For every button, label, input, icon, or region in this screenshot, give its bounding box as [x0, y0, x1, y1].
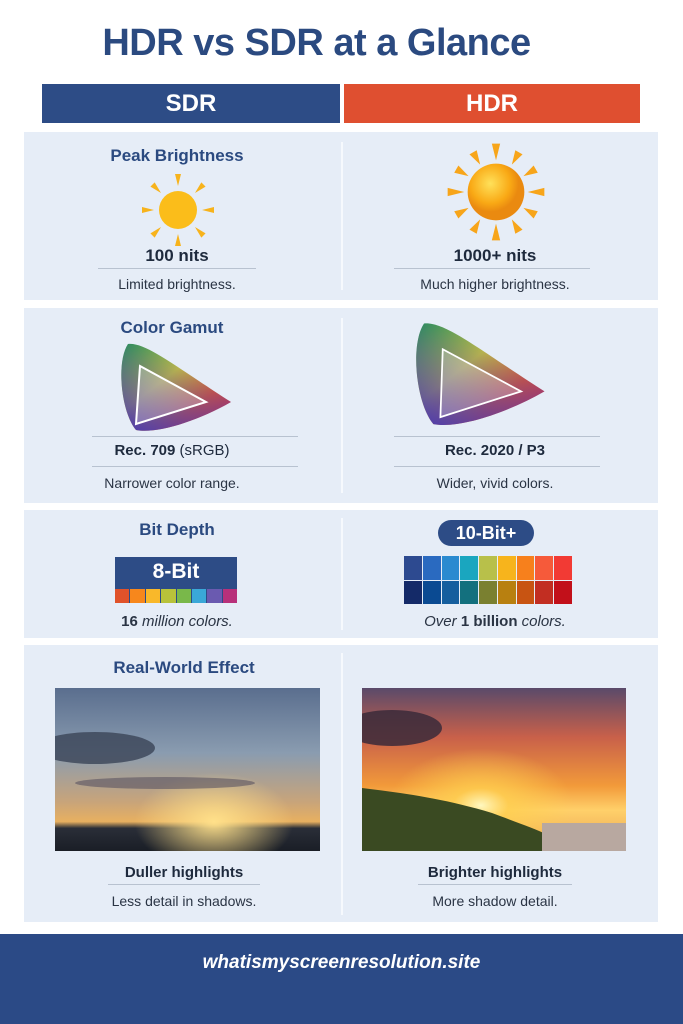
header: SDR: SDR	[166, 90, 216, 117]
description: Much higher brightness.	[420, 276, 570, 292]
chart: HDR gamut	[416, 323, 544, 425]
description: Over 1 billion colors.	[424, 613, 566, 630]
caption: Brighter highlights	[428, 864, 562, 881]
icon: small sun	[142, 174, 214, 246]
chart: SDR gamut	[121, 344, 231, 431]
label: Rec. 2020 / P3	[445, 442, 545, 459]
image: SDR sunset	[55, 688, 320, 851]
caption: Duller highlights	[125, 864, 243, 881]
footer url: whatismyscreenresolution.site	[203, 952, 480, 973]
description: Limited brightness.	[118, 276, 236, 292]
8-bit swatch: 8-Bit	[153, 560, 199, 583]
image: HDR sunset	[362, 688, 626, 851]
description: 16 million colors.	[121, 613, 233, 630]
header: SDR	[42, 84, 340, 123]
label: Rec. 709 (sRGB)	[114, 442, 230, 459]
icon: big sun	[448, 144, 544, 240]
description: Less detail in shadows.	[112, 893, 256, 909]
heading: Color Gamut	[121, 318, 223, 337]
footer	[0, 934, 683, 1024]
panel: real-world effect	[24, 645, 658, 922]
heading: Peak Brightness	[110, 146, 244, 165]
10-bit badge: 10-Bit+	[456, 523, 516, 543]
heading: Real-World Effect	[113, 658, 255, 677]
10-bit gradient grid	[404, 556, 572, 604]
10-bit badge	[438, 520, 534, 546]
title: HDR vs SDR at a Glance	[102, 22, 531, 64]
panel: color gamut	[24, 308, 658, 503]
description: Narrower color range.	[104, 475, 240, 491]
description: More shadow detail.	[432, 893, 558, 909]
value: 1000+ nits	[454, 246, 536, 265]
8-bit swatch	[115, 557, 237, 603]
header: HDR	[344, 84, 640, 123]
header: HDR: HDR	[466, 90, 518, 117]
panel: peak brightness	[24, 132, 658, 300]
value: 100 nits	[145, 246, 209, 265]
panel: bit depth	[24, 510, 658, 638]
description: Wider, vivid colors.	[437, 475, 553, 491]
heading: Bit Depth	[139, 520, 215, 539]
